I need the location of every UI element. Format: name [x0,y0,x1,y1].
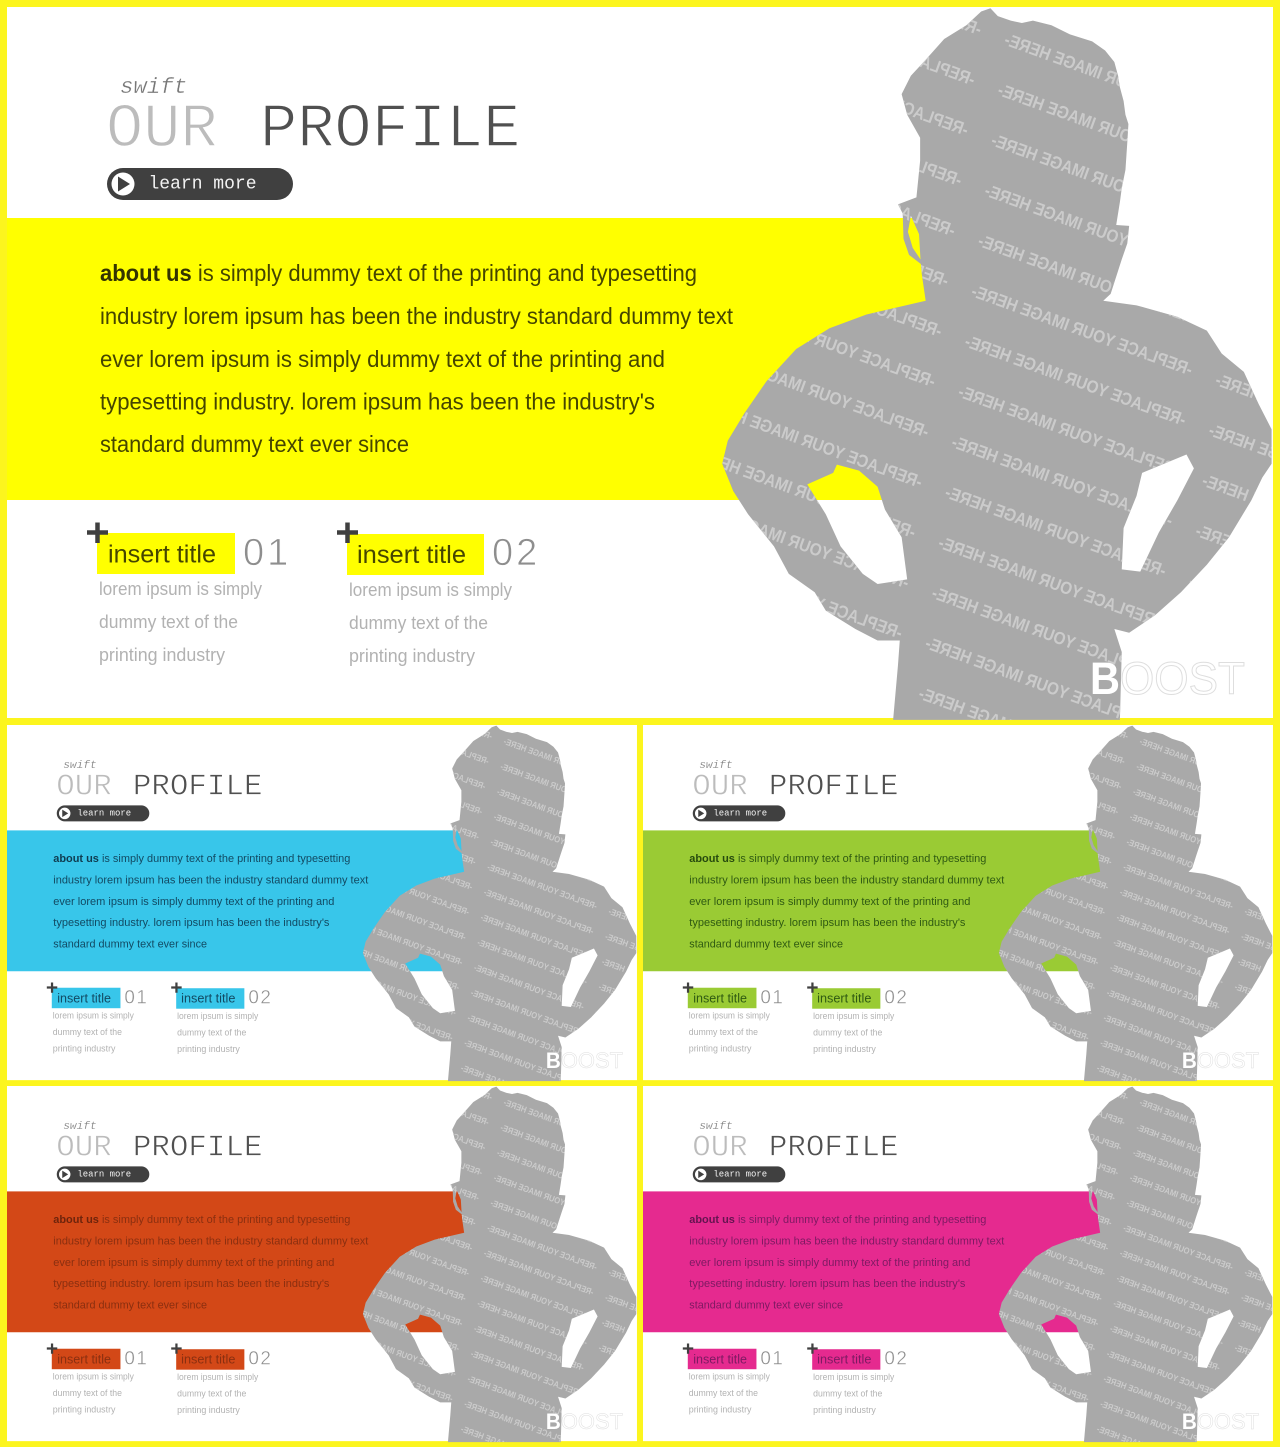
feature 02 [171,982,272,1054]
title: OUR PROFILE: PROFILE [769,769,898,804]
silhouette placeholder [362,726,636,1082]
feature 02: printing industry [349,645,476,666]
subtitle: swift: swift [699,1121,733,1133]
feature 01: dummy text of the [53,1027,122,1037]
feature 01: 01 [243,532,291,574]
feature 02: printing industry [177,1405,240,1415]
silhouette placeholder: -REPLACE YOUR IMAGE HERE- -REPLACE YOUR IMAGE HERE- -REPLACE YOUR IMAGE HERE- [381,692,736,830]
silhouette placeholder: -REPLACE YOUR IMAGE HERE- -REPLACE YOUR IMAGE HERE- -REPLACE YOUR IMAGE HERE- [377,1078,733,1216]
silhouette placeholder: -REPLACE YOUR IMAGE HERE- -REPLACE YOUR IMAGE HERE- -REPLACE YOUR IMAGE HERE- [348,1305,703,1442]
body text: ever lorem ipsum is simply dummy text of the printing and [53,896,334,908]
feature 02 [807,982,908,1054]
silhouette placeholder: -REPLACE YOUR IMAGE HERE- -REPLACE YOUR IMAGE HERE- -REPLACE YOUR IMAGE HERE- [358,1229,713,1367]
body text: ever lorem ipsum is simply dummy text of the printing and [689,896,970,908]
feature 02: dummy text of the [177,1389,246,1399]
silhouette placeholder: -REPLACE YOUR IMAGE HERE- -REPLACE YOUR IMAGE HERE- -REPLACE YOUR IMAGE HERE- [368,793,723,930]
silhouette placeholder [362,1086,636,1442]
feature 01: 01 [124,988,148,1009]
button: learn more: learn more [713,1170,767,1180]
feature 01: printing industry [689,1405,752,1415]
logo: BOOST: OOST [561,1048,623,1073]
feature 02: lorem ipsum is simply [813,1372,895,1382]
silhouette placeholder: -REPLACE YOUR IMAGE HERE- -REPLACE YOUR IMAGE HERE- -REPLACE YOUR IMAGE HERE- [348,944,703,1081]
logo: BOOST: B [1090,653,1120,704]
title: OUR PROFILE: OUR [692,769,748,804]
feature 01: printing industry [99,644,226,665]
silhouette placeholder [998,726,1272,1082]
logo: BOOST: B [1182,1048,1197,1073]
silhouette placeholder: -REPLACE YOUR IMAGE HERE- -REPLACE YOUR IMAGE HERE- -REPLACE YOUR IMAGE HERE- [345,969,700,1106]
feature 02: dummy text of the [813,1389,882,1399]
body text [53,853,369,950]
feature 02: dummy text of the [177,1028,246,1038]
body text: ever lorem ipsum is simply dummy text of the printing and [53,1257,334,1269]
feature 02: insert title [357,541,466,569]
silhouette placeholder: -REPLACE YOUR IMAGE HERE- -REPLACE YOUR IMAGE HERE- -REPLACE YOUR IMAGE HERE- [364,818,720,956]
logo: BOOST: B [546,1409,561,1434]
silhouette placeholder: -REPLACE YOUR IMAGE HERE- -REPLACE YOUR IMAGE HERE- -REPLACE YOUR IMAGE HERE- [364,1179,720,1317]
feature 02: 02 [884,1349,908,1370]
body text: typesetting industry. lorem ipsum has been the industry's [53,1278,330,1290]
body text: about us is simply dummy text of the printing and typesetting [53,1214,350,1226]
silhouette placeholder: -REPLACE YOUR IMAGE HERE- -REPLACE YOUR IMAGE HERE- -REPLACE YOUR IMAGE HERE- [377,717,733,855]
silhouette placeholder: -REPLACE YOUR IMAGE HERE- -REPLACE YOUR IMAGE HERE- -REPLACE YOUR IMAGE HERE- [338,1019,693,1157]
feature 02: printing industry [813,1405,876,1415]
panel: green profile slide [643,725,1273,1082]
feature 01: insert title [57,991,111,1005]
feature 02: lorem ipsum is simply [177,1011,259,1021]
body text: industry lorem ipsum has been the industry standard dummy text [689,1235,1005,1247]
feature 01: lorem ipsum is simply [53,1372,134,1382]
feature 01: lorem ipsum is simply [689,1011,770,1021]
body text: about us is simply dummy text of the printing and typesetting [53,853,350,865]
subtitle: swift: swift [120,74,187,100]
feature 02: 02 [248,988,272,1009]
body text: standard dummy text ever since [53,938,207,950]
body text: about us is simply dummy text of the printing and typesetting [100,260,697,286]
title: OUR PROFILE: PROFILE [133,769,262,804]
title: OUR PROFILE: OUR [56,769,112,804]
body text: typesetting industry. lorem ipsum has been the industry's [689,1278,966,1290]
feature 02: 02 [248,1349,272,1370]
body text: ever lorem ipsum is simply dummy text of the printing and [100,346,665,372]
body text [689,853,1005,950]
feature 01: 01 [760,988,784,1009]
body text: typesetting industry. lorem ipsum has been the industry's [689,917,966,929]
feature 01: insert title [57,1352,111,1366]
button: learn more: learn more [713,809,767,819]
slide background [7,725,637,1080]
feature 02: printing industry [813,1044,876,1054]
feature 02 [337,522,540,666]
feature 02: 02 [492,532,540,574]
body text: standard dummy text ever since [53,1299,207,1311]
feature 02: dummy text of the [349,612,488,633]
feature 01: insert title [693,991,747,1005]
silhouette placeholder: -REPLACE YOUR IMAGE HERE- -REPLACE YOUR IMAGE HERE- -REPLACE YOUR IMAGE HERE- [354,1254,710,1392]
body text: standard dummy text ever since [689,938,843,950]
title: OUR PROFILE: OUR [106,94,218,165]
body text: typesetting industry. lorem ipsum has been the industry's [53,917,330,929]
title: OUR PROFILE: PROFILE [769,1130,898,1165]
button: learn more [57,1166,149,1182]
feature 02 [171,1343,272,1415]
slide background [643,1086,1273,1441]
panel: blue profile slide [7,725,637,1082]
silhouette placeholder: -REPLACE YOUR IMAGE HERE- -REPLACE YOUR IMAGE HERE- -REPLACE YOUR IMAGE HERE- [354,893,710,1031]
feature 01: printing industry [689,1044,752,1054]
logo: BOOST: OOST [1197,1048,1259,1073]
silhouette placeholder [722,8,1272,720]
subtitle: swift: swift [63,760,97,772]
title: OUR PROFILE: PROFILE [260,94,520,165]
silhouette placeholder: -REPLACE YOUR IMAGE HERE- -REPLACE YOUR IMAGE HERE- -REPLACE YOUR IMAGE HERE- [374,1104,729,1241]
slide background [7,1086,637,1441]
silhouette placeholder: -REPLACE YOUR IMAGE HERE- -REPLACE YOUR IMAGE HERE- -REPLACE YOUR IMAGE HERE- [351,1279,706,1417]
subtitle: swift: swift [699,760,733,772]
feature 01: dummy text of the [53,1388,122,1398]
logo: BOOST: OOST [561,1409,623,1434]
silhouette placeholder [998,1086,1272,1442]
feature 02: 02 [884,988,908,1009]
feature 01: lorem ipsum is simply [689,1372,770,1382]
feature 02: lorem ipsum is simply [813,1011,895,1021]
logo: BOOST: OOST [1120,653,1245,704]
button: learn more [693,805,785,821]
feature 02: insert title [181,1353,235,1367]
body text: industry lorem ipsum has been the industry standard dummy text [100,303,734,329]
button: learn more: learn more [148,174,257,194]
silhouette placeholder: -REPLACE YOUR IMAGE HERE- -REPLACE YOUR IMAGE HERE- -REPLACE YOUR IMAGE HERE- [381,1053,736,1191]
feature 01 [683,1343,784,1415]
feature 02: dummy text of the [813,1028,882,1038]
subtitle: swift: swift [63,1121,97,1133]
button: learn more [107,168,293,200]
colour band [7,1191,485,1332]
silhouette placeholder: -REPLACE YOUR IMAGE HERE- -REPLACE YOUR IMAGE HERE- -REPLACE YOUR IMAGE HERE- [371,1129,726,1266]
silhouette placeholder: -REPLACE YOUR IMAGE HERE- -REPLACE YOUR IMAGE HERE- -REPLACE YOUR IMAGE HERE- [374,743,729,880]
feature 02: insert title [817,1353,871,1367]
body text [689,1214,1005,1311]
button: learn more [693,1166,785,1182]
feature 01: dummy text of the [689,1388,758,1398]
silhouette placeholder: -REPLACE YOUR IMAGE HERE- -REPLACE YOUR IMAGE HERE- -REPLACE YOUR IMAGE HERE- [358,868,713,1006]
feature 02: insert title [817,992,871,1006]
button: learn more: learn more [77,1170,131,1180]
button: learn more [57,805,149,821]
feature 01: insert title [108,540,216,568]
panel: yellow profile slide [7,7,1273,720]
title: OUR PROFILE: PROFILE [133,1130,262,1165]
body text: typesetting industry. lorem ipsum has been the industry's [100,388,655,414]
body text: industry lorem ipsum has been the industry standard dummy text [53,1235,369,1247]
colour band [643,1191,1121,1332]
silhouette placeholder: -REPLACE YOUR IMAGE HERE- -REPLACE YOUR IMAGE HERE- -REPLACE YOUR IMAGE HERE- [368,1154,723,1291]
body text: about us is simply dummy text of the printing and typesetting [689,1214,986,1226]
logo: BOOST: B [546,1048,561,1073]
body text: ever lorem ipsum is simply dummy text of the printing and [689,1257,970,1269]
body text [53,1214,369,1311]
feature 01: dummy text of the [99,611,238,632]
body text: industry lorem ipsum has been the industry standard dummy text [53,874,369,886]
silhouette placeholder: -REPLACE YOUR IMAGE HERE- -REPLACE YOUR IMAGE HERE- -REPLACE YOUR IMAGE HERE- [361,1204,716,1342]
title: OUR PROFILE: OUR [692,1130,748,1165]
silhouette placeholder: -REPLACE YOUR IMAGE HERE- -REPLACE YOUR IMAGE HERE- -REPLACE YOUR IMAGE HERE- [361,843,716,981]
logo: BOOST: OOST [1197,1409,1259,1434]
colour band [643,830,1121,971]
silhouette placeholder: -REPLACE YOUR IMAGE HERE- -REPLACE YOUR IMAGE HERE- -REPLACE YOUR IMAGE HERE- [371,768,726,905]
feature 02: printing industry [177,1044,240,1054]
button: learn more: learn more [77,809,131,819]
slide background [7,7,1273,718]
feature 01: printing industry [53,1405,116,1415]
body text: about us is simply dummy text of the printing and typesetting [689,853,986,865]
logo: BOOST: B [1182,1409,1197,1434]
feature 01 [87,522,291,665]
feature 01 [683,982,784,1054]
feature 01: lorem ipsum is simply [53,1011,134,1021]
body text [100,260,734,457]
feature 02 [807,1343,908,1415]
feature 01: insert title [693,1352,747,1366]
feature 02: lorem ipsum is simply [349,579,513,600]
feature 01: printing industry [53,1044,116,1054]
colour band [7,218,967,500]
body text: standard dummy text ever since [100,431,409,457]
feature 02: insert title [181,992,235,1006]
silhouette placeholder: -REPLACE YOUR IMAGE HERE- -REPLACE YOUR IMAGE HERE- -REPLACE YOUR IMAGE HERE- [351,918,706,1056]
feature 01: 01 [760,1349,784,1370]
feature 01: 01 [124,1349,148,1370]
feature 01 [47,982,148,1054]
colour band [7,830,485,971]
silhouette placeholder: -REPLACE YOUR IMAGE HERE- -REPLACE YOUR IMAGE HERE- -REPLACE YOUR IMAGE HERE- [341,994,697,1131]
panel: orange profile slide [7,1086,637,1442]
body text: standard dummy text ever since [689,1299,843,1311]
feature 02: lorem ipsum is simply [177,1372,259,1382]
feature 01: lorem ipsum is simply [99,578,263,599]
panel: pink profile slide [643,1086,1273,1442]
body text: industry lorem ipsum has been the industry standard dummy text [689,874,1005,886]
feature 01 [47,1343,148,1415]
title: OUR PROFILE: OUR [56,1130,112,1165]
slide background [643,725,1273,1080]
feature 01: dummy text of the [689,1027,758,1037]
